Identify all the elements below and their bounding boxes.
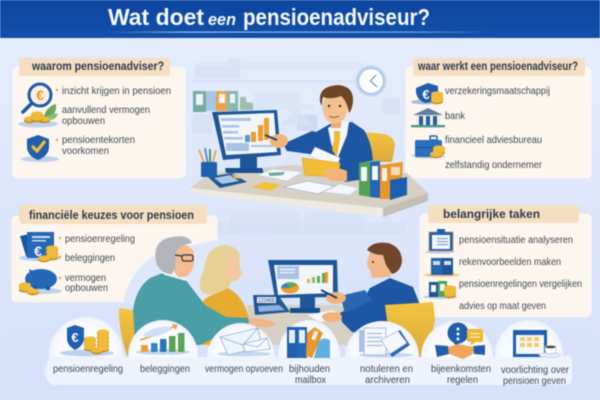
panel heading xyxy=(19,205,207,224)
icon: insurance shield xyxy=(411,83,443,104)
bubble labels: pensioenregeling xyxy=(53,364,123,375)
bullets xyxy=(56,89,58,141)
background arc behind couple xyxy=(123,240,217,305)
pie chart xyxy=(281,282,299,294)
list text: opbouwen xyxy=(65,283,108,294)
list text: bank xyxy=(445,111,466,122)
list text: financieel adviesbureau xyxy=(445,135,542,146)
monitor with chart xyxy=(212,110,281,173)
pen cup xyxy=(199,148,217,177)
calculator xyxy=(208,173,247,188)
bullets xyxy=(59,237,61,279)
panel: waar werkt een pensioenadviseur xyxy=(406,58,591,178)
icon: documents xyxy=(359,328,413,358)
chair: client xyxy=(119,308,163,358)
head xyxy=(367,243,402,278)
panel heading: belangrijke taken xyxy=(443,209,540,221)
list text: pensioensituatie analyseren xyxy=(459,235,573,246)
list text: verzekeringsmaatschappij xyxy=(445,86,550,97)
binders on desk xyxy=(359,160,407,200)
panel: belangrijke taken xyxy=(420,205,591,317)
meeting calculator: 123456 xyxy=(258,298,275,304)
icon: shield with check xyxy=(21,135,59,162)
icon: bank xyxy=(411,108,445,127)
icon: envelopes xyxy=(217,328,271,356)
bottom strip: task bubbles xyxy=(45,317,572,393)
list text xyxy=(62,86,171,157)
title: een xyxy=(208,10,236,29)
paper xyxy=(307,310,345,322)
list text: pensioenregeling xyxy=(65,234,135,245)
panel: waarom pensioenadviser xyxy=(13,58,185,178)
list text: inzicht krijgen in pensioen xyxy=(62,86,171,97)
meeting desk xyxy=(247,305,382,345)
desk papers and note xyxy=(252,169,359,195)
icon: magnifier with euro: € xyxy=(36,87,44,103)
title: pensioenadviseur? xyxy=(243,4,430,30)
list text: advies op maat geven xyxy=(459,301,546,312)
label band xyxy=(45,355,572,385)
yellow folder xyxy=(302,147,340,177)
panel heading xyxy=(413,58,585,76)
list text: zelfstandig ondernemer xyxy=(445,160,543,171)
pointing hand and pen xyxy=(265,134,288,148)
panel heading xyxy=(19,58,170,76)
list text: vermogen xyxy=(65,273,106,284)
panel heading: financiële keuzes voor pensioen xyxy=(29,210,194,222)
jacket xyxy=(340,278,420,340)
panel heading xyxy=(428,205,579,223)
icon: briefcase with coins xyxy=(411,136,445,158)
icon: pension shield and coins xyxy=(60,325,114,356)
bubble labels: bijeenkomsten xyxy=(431,364,491,375)
adviser with folder xyxy=(265,85,373,182)
meeting monitor xyxy=(268,260,338,313)
icon: pension shield and coins: € xyxy=(71,330,79,345)
client couple xyxy=(133,236,277,345)
woman xyxy=(197,245,249,345)
icon: binders with coins xyxy=(423,281,457,299)
icon: pension document xyxy=(19,232,61,262)
list text: voorkomen xyxy=(62,146,109,157)
list text: rekenvoorbeelden maken xyxy=(459,257,561,268)
mini bar chart xyxy=(307,272,328,283)
adviser facing couple xyxy=(307,243,420,340)
icon: calendar and cup xyxy=(513,330,561,358)
header band xyxy=(0,0,600,38)
desk xyxy=(190,165,428,217)
list text xyxy=(445,86,550,171)
list text xyxy=(65,234,135,294)
chair: adviser right xyxy=(385,302,435,358)
bubble labels: notuleren en xyxy=(360,364,413,375)
list text: pensioentekorten xyxy=(62,135,135,146)
title: Wat doet xyxy=(108,4,204,30)
chair: adviser xyxy=(365,132,395,162)
jacket xyxy=(283,122,373,182)
bubble labels: archiveren xyxy=(365,375,410,386)
list text: aanvullend vermogen xyxy=(62,105,150,116)
bubble labels: beleggingen xyxy=(140,364,190,375)
bubble labels: voorlichting over xyxy=(501,365,570,376)
background office shelves xyxy=(192,58,415,315)
hands and pen xyxy=(321,290,346,322)
bubble labels: mailbox xyxy=(295,375,326,386)
title xyxy=(108,4,430,30)
icon: insurance shield: € xyxy=(422,87,430,102)
icon: pension document: € xyxy=(34,243,42,259)
bubble labels xyxy=(53,364,570,387)
icon: clipboard xyxy=(425,229,455,254)
bubble labels: pensioen geven xyxy=(503,376,566,387)
meeting calculator xyxy=(253,295,290,315)
bubble labels: regelen xyxy=(447,375,478,386)
bubble labels: vermogen opvoeven xyxy=(205,364,283,375)
icon: speech bubbles and handshake xyxy=(435,322,485,359)
icon: investments bar chart xyxy=(136,324,190,355)
title underline xyxy=(105,32,490,33)
background folders on shelf xyxy=(193,91,253,112)
bubble labels: bijhouden xyxy=(289,364,330,375)
icon: binders xyxy=(287,327,330,358)
shirt and tie xyxy=(328,122,349,160)
list text: pensioenregelingen vergelijken xyxy=(459,279,582,290)
panel heading: waarom pensioenadviser? xyxy=(31,61,164,73)
head xyxy=(320,85,353,128)
icon: piggy bank xyxy=(18,269,62,295)
panel: financiële keuzes voor pensioen xyxy=(12,205,217,305)
icon: two binders xyxy=(424,258,460,277)
list text xyxy=(459,235,582,312)
clock xyxy=(356,66,386,96)
man xyxy=(133,236,277,345)
icon: magnifier with euro xyxy=(18,84,58,127)
holding hand xyxy=(323,168,347,181)
bubble backgrounds xyxy=(49,317,563,359)
list text: beleggingen xyxy=(65,253,115,264)
list text: opbouwen xyxy=(62,116,105,127)
